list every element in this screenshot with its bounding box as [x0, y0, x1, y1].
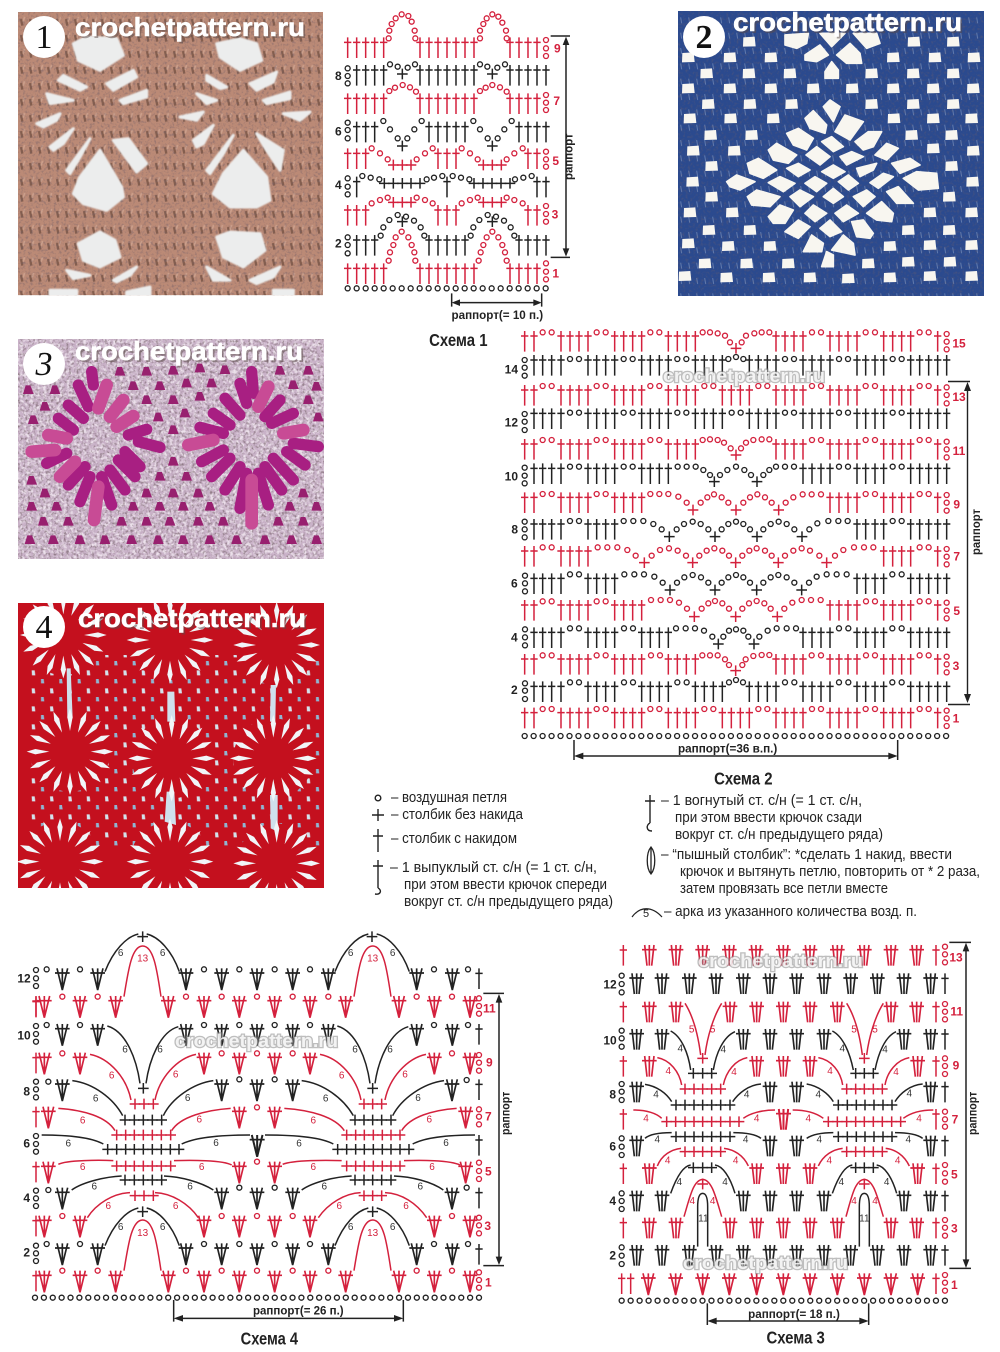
arch stitch counts: 6: [311, 1162, 317, 1173]
arch stitch counts: 4: [643, 1114, 649, 1125]
text: raised back stitch: [661, 793, 883, 843]
photo 3 watermark: crochetpattern.ru: [77, 338, 305, 368]
arch stitch counts: 6: [322, 1181, 328, 1192]
chart 4 watermark: crochetpattern.ru: [175, 1031, 338, 1051]
arch stitch counts: 6: [339, 1070, 345, 1081]
arch stitch counts: 4: [816, 1089, 822, 1100]
arch stitch counts: 6: [387, 1045, 393, 1056]
arch stitch counts: 4: [690, 1196, 696, 1207]
arch stitch counts: [66, 948, 449, 1239]
row numbers: 5: [951, 1167, 958, 1181]
row numbers: 3: [484, 1219, 491, 1233]
text: raised back stitch: – 1 вогнутый ст. с/н (= 1 ст. с/н,: [661, 793, 862, 809]
vertical repeat arrow: раппорт: [498, 1092, 512, 1135]
horizontal repeat arrow: [707, 1303, 869, 1325]
row numbers: 13: [949, 950, 963, 964]
arch stitch counts: 6: [443, 1138, 449, 1149]
row numbers lower: 3: [953, 659, 960, 673]
arch stitch counts: 4: [839, 1177, 845, 1188]
text: raised back stitch: вокруг ст. с/н предыдущего ряда): [675, 827, 883, 843]
text: raised front stitch: при этом ввести крючок спереди: [404, 877, 607, 893]
arch stitch counts: 5: [872, 1024, 878, 1035]
photo 3 number badge: 3: [34, 346, 52, 383]
horizontal repeat arrow: [174, 1300, 403, 1322]
arch stitch counts: 6: [352, 1045, 358, 1056]
row numbers lower: 1: [953, 711, 960, 725]
arch stitch counts: 4: [754, 1114, 760, 1125]
arch stitch counts: 4: [743, 1135, 749, 1146]
arch stitch counts: 4: [840, 1044, 846, 1055]
arch stitch counts: 6: [80, 1115, 86, 1126]
row numbers: 5: [485, 1165, 492, 1179]
arch stitch counts: 4: [916, 1114, 922, 1125]
caption Схема 3: Схема 3: [766, 1328, 825, 1348]
black chain arches: [645, 1031, 923, 1247]
arch stitch counts: 6: [118, 1222, 124, 1233]
upper rows 15 to 8: [505, 331, 966, 537]
row numbers: 12: [17, 972, 31, 986]
vertical repeat arrow: [483, 993, 512, 1266]
arch stitch counts: 4: [851, 1196, 857, 1207]
arch stitch counts: 4: [653, 1089, 659, 1100]
row numbers: 8: [23, 1084, 30, 1098]
row numbers: 3: [951, 1221, 958, 1235]
row numbers: 3: [552, 207, 559, 221]
arch stitch counts: 4: [907, 1089, 913, 1100]
row numbers: [17, 972, 496, 1289]
red chain arches: [58, 946, 460, 1271]
text: puff stitch: – “пышный столбик”: *сделать 1 накид, ввести: [661, 847, 952, 863]
photo 1 number badge: [23, 16, 65, 58]
photo 4 number badge: 4: [36, 609, 52, 646]
arch stitch counts: 6: [199, 1162, 205, 1173]
row numbers lower: 5: [953, 604, 960, 618]
text: raised front stitch: вокруг ст. с/н предыдущего ряда): [404, 894, 613, 910]
arch stitch counts: 4: [817, 1135, 823, 1146]
arch stitch counts: 6: [66, 1139, 72, 1150]
horizontal repeat arrow: раппорт(= 26 п.): [253, 1303, 344, 1317]
photo 2 number badge: [683, 16, 725, 58]
arch stitch counts: 13: [367, 1228, 379, 1239]
legend right column: [632, 793, 980, 920]
horizontal repeat arrow: [574, 740, 898, 760]
vertical repeat arrow: [948, 382, 983, 704]
vertical repeat arrow: [949, 942, 980, 1268]
arch stitch counts: 6: [106, 1201, 112, 1212]
row numbers: 6: [23, 1137, 30, 1151]
text: raised front stitch: [390, 860, 613, 910]
chart: Схема 2: [505, 331, 983, 788]
arch stitch counts: 6: [80, 1162, 86, 1173]
red chain arches: [633, 1003, 933, 1217]
row numbers: 1: [951, 1278, 958, 1292]
arch stitch counts: 6: [187, 1181, 193, 1192]
caption Схема 4: Схема 4: [241, 1328, 298, 1348]
arch stitch counts: 6: [122, 1045, 128, 1056]
arch stitch counts: 4: [806, 1114, 812, 1125]
arch stitch counts: 11: [859, 1214, 870, 1225]
arch stitch counts: 4: [678, 1044, 684, 1055]
arch stitch counts: 13: [137, 954, 149, 965]
arch stitch counts: 13: [367, 954, 379, 965]
vertical repeat arrow: раппорт: [966, 1092, 980, 1135]
horizontal repeat arrow: раппорт(=36 в.п.): [678, 742, 777, 756]
chart: Схема 1: [335, 14, 576, 350]
photo 4: red crochet swatch: [17, 592, 324, 907]
arch stitch counts: 5: [710, 1024, 716, 1035]
photo 2 watermark: crochetpattern.ru: [735, 9, 964, 39]
photo 4 watermark: crochetpattern.ru: [80, 605, 308, 635]
arch stitch counts: 4: [884, 1177, 890, 1188]
arch stitch counts: 4: [733, 1155, 739, 1166]
row numbers: 4: [609, 1194, 616, 1208]
arch stitch counts: 6: [185, 1093, 191, 1104]
row numbers: 1: [485, 1275, 492, 1289]
caption Схема 1: Схема 1: [429, 330, 488, 350]
arch stitch counts: 4: [895, 1155, 901, 1166]
photo 3 watermark: crochetpattern.ru: [75, 336, 303, 366]
black chain arches: [42, 934, 475, 1246]
icon: puff stitch: [647, 847, 655, 874]
arch stitch counts: 4: [906, 1135, 912, 1146]
arch stitch counts: 6: [323, 1094, 329, 1105]
arch stitch counts: 4: [666, 1066, 672, 1077]
arch stitch counts: 4: [665, 1155, 671, 1166]
icon: raised front stitch: [373, 860, 383, 894]
chart: Схема 3: [603, 942, 980, 1348]
row numbers upper: [505, 336, 966, 536]
arch stitch counts: 6: [109, 1070, 115, 1081]
arch stitch counts: [643, 1024, 922, 1225]
icon: chain arch: 5: [643, 908, 649, 920]
row numbers: 2: [335, 236, 342, 250]
arch stitch counts: 4: [744, 1089, 750, 1100]
caption Схема 2: Схема 2: [714, 768, 772, 788]
row numbers: 1: [552, 266, 559, 280]
row numbers upper: 15: [952, 336, 966, 350]
row numbers: 6: [609, 1140, 616, 1154]
arch stitch counts: 11: [698, 1214, 709, 1225]
arch stitch counts: 4: [827, 1155, 833, 1166]
row numbers: 7: [553, 94, 560, 108]
arch stitch counts: 6: [197, 1115, 203, 1126]
arch stitch counts: 13: [137, 1228, 149, 1239]
arch stitch counts: 6: [160, 1222, 166, 1233]
photo 3 number badge: [23, 343, 65, 385]
arch stitch counts: 6: [118, 948, 124, 959]
arch stitch counts: 6: [173, 1201, 179, 1212]
chart: Схема 4: [17, 934, 512, 1348]
arch stitch counts: 6: [415, 1093, 421, 1104]
arch stitch counts: 6: [403, 1201, 409, 1212]
arch stitch counts: 4: [731, 1067, 737, 1078]
row numbers: 2: [609, 1249, 616, 1263]
arch stitch counts: 4: [893, 1067, 899, 1078]
row numbers upper: 13: [952, 390, 966, 404]
row numbers: 12: [603, 977, 617, 991]
horizontal repeat arrow: раппорт(= 10 п.): [451, 308, 543, 322]
arch stitch counts: 6: [296, 1139, 302, 1150]
arch stitch counts: 6: [348, 948, 354, 959]
row numbers: [603, 950, 963, 1292]
arch stitch counts: 6: [157, 1045, 163, 1056]
row numbers upper: 14: [505, 362, 518, 376]
vertical repeat arrow: раппорт: [969, 509, 983, 555]
lower rows 7 to 1: [511, 546, 960, 788]
chart 3 lower watermark: crochetpattern.ru: [683, 1253, 848, 1273]
chart 3 upper watermark: crochetpattern.ru: [698, 951, 863, 971]
vertical repeat arrow: [551, 36, 576, 257]
photo 1 number badge: 1: [36, 19, 52, 56]
icon: chain arch: [632, 908, 662, 920]
arch stitch counts: 4: [722, 1177, 728, 1188]
chart 3 lower watermark: crochetpattern.ru: [683, 1253, 848, 1273]
row numbers: 5: [552, 154, 559, 168]
arch stitch counts: 5: [689, 1024, 695, 1035]
row numbers: 8: [609, 1087, 616, 1101]
row numbers lower: 4: [511, 630, 518, 644]
row numbers: 6: [335, 125, 342, 139]
arch stitch counts: 6: [92, 1181, 98, 1192]
arch stitch counts: 4: [677, 1177, 683, 1188]
photo 2 watermark: crochetpattern.ru: [733, 7, 962, 37]
row numbers: 4: [335, 178, 342, 192]
arch stitch counts: 6: [173, 1069, 179, 1080]
arch stitch counts: 6: [402, 1069, 408, 1080]
row numbers upper: 11: [953, 444, 966, 458]
arch stitch counts: 6: [93, 1094, 99, 1105]
photo 2 number badge: 2: [696, 19, 712, 56]
arch stitch counts: 6: [429, 1162, 435, 1173]
arch stitch counts: 6: [390, 948, 396, 959]
legend left column: [372, 790, 613, 910]
horizontal repeat arrow: раппорт(= 18 п.): [748, 1307, 840, 1321]
row numbers: 11: [483, 1001, 496, 1015]
row numbers: 10: [603, 1034, 617, 1048]
row numbers: 8: [335, 69, 342, 83]
text: chain stitch: – воздушная петля: [391, 790, 507, 806]
photo 1 watermark: crochetpattern.ru: [77, 14, 307, 44]
chart 2 watermark: crochetpattern.ru: [663, 366, 825, 386]
text: puff stitch: затем провязать все петли вместе: [680, 881, 888, 897]
photo 2: blue filet crochet swatch: [678, 7, 984, 296]
row numbers upper: 10: [505, 470, 518, 484]
text: single crochet: – столбик без накида: [391, 807, 524, 823]
arch stitch counts: 4: [710, 1196, 716, 1207]
row numbers: 4: [23, 1191, 30, 1205]
arch stitch counts: 4: [882, 1044, 888, 1055]
row numbers lower: [511, 550, 960, 725]
photo 1: brown crochet swatch: [18, 12, 323, 295]
row numbers: 9: [486, 1056, 493, 1070]
text: puff stitch: [661, 847, 980, 897]
horizontal repeat arrow: [451, 293, 543, 322]
chart 4 watermark: crochetpattern.ru: [175, 1031, 338, 1051]
text: puff stitch: крючок и вытянуть петлю, повторить от * 2 раза,: [680, 864, 980, 880]
icon: raised back stitch: [645, 795, 655, 831]
arch stitch counts: 6: [337, 1201, 343, 1212]
arch stitch counts: 4: [655, 1135, 661, 1146]
row numbers: 7: [485, 1110, 492, 1124]
row numbers: 11: [950, 1005, 963, 1019]
photo 3: magenta and white crochet swatch: [18, 336, 324, 559]
row numbers lower: 7: [953, 550, 960, 564]
text: raised back stitch: при этом ввести крючок сзади: [675, 810, 862, 826]
arch stitch counts: 6: [418, 1181, 424, 1192]
vertical repeat arrow: раппорт: [562, 133, 576, 180]
arch stitch counts: 4: [827, 1066, 833, 1077]
row numbers upper: 12: [505, 416, 518, 430]
text: double crochet: – столбик с накидом: [391, 831, 517, 847]
photo 4 watermark: crochetpattern.ru: [78, 603, 306, 633]
arch stitch counts: 6: [427, 1115, 433, 1126]
text: raised front stitch: – 1 выпуклый ст. с/н (= 1 ст. с/н,: [390, 860, 597, 876]
row numbers lower: 6: [511, 576, 518, 590]
arch stitch counts: 6: [213, 1138, 219, 1149]
chart 3 upper watermark: crochetpattern.ru: [698, 951, 863, 971]
icon: chain stitch: [375, 795, 381, 801]
row numbers lower: 2: [511, 683, 518, 697]
row numbers: 9: [554, 41, 561, 55]
arch stitch counts: 4: [872, 1196, 878, 1207]
text: chain arch: – арка из указанного количества возд. п.: [664, 904, 917, 920]
photo 1 watermark: crochetpattern.ru: [75, 12, 305, 42]
arch stitch counts: 4: [721, 1044, 727, 1055]
row numbers upper: 9: [953, 497, 960, 511]
row numbers: 10: [17, 1028, 31, 1042]
row numbers: 7: [952, 1112, 959, 1126]
arch stitch counts: 6: [311, 1115, 317, 1126]
icon: double crochet: [373, 829, 383, 852]
row numbers upper: 8: [511, 522, 518, 536]
row numbers: 9: [953, 1059, 960, 1073]
photo 4 number badge: [23, 606, 65, 648]
row numbers: 2: [23, 1246, 30, 1260]
arch stitch counts: 6: [160, 948, 166, 959]
arch stitch counts: 6: [348, 1222, 354, 1233]
row numbers: [335, 41, 561, 280]
arch stitch counts: 5: [851, 1024, 857, 1035]
chart 2 watermark: crochetpattern.ru: [663, 366, 825, 386]
arch stitch counts: 6: [390, 1222, 396, 1233]
icon: single crochet: [372, 809, 384, 821]
